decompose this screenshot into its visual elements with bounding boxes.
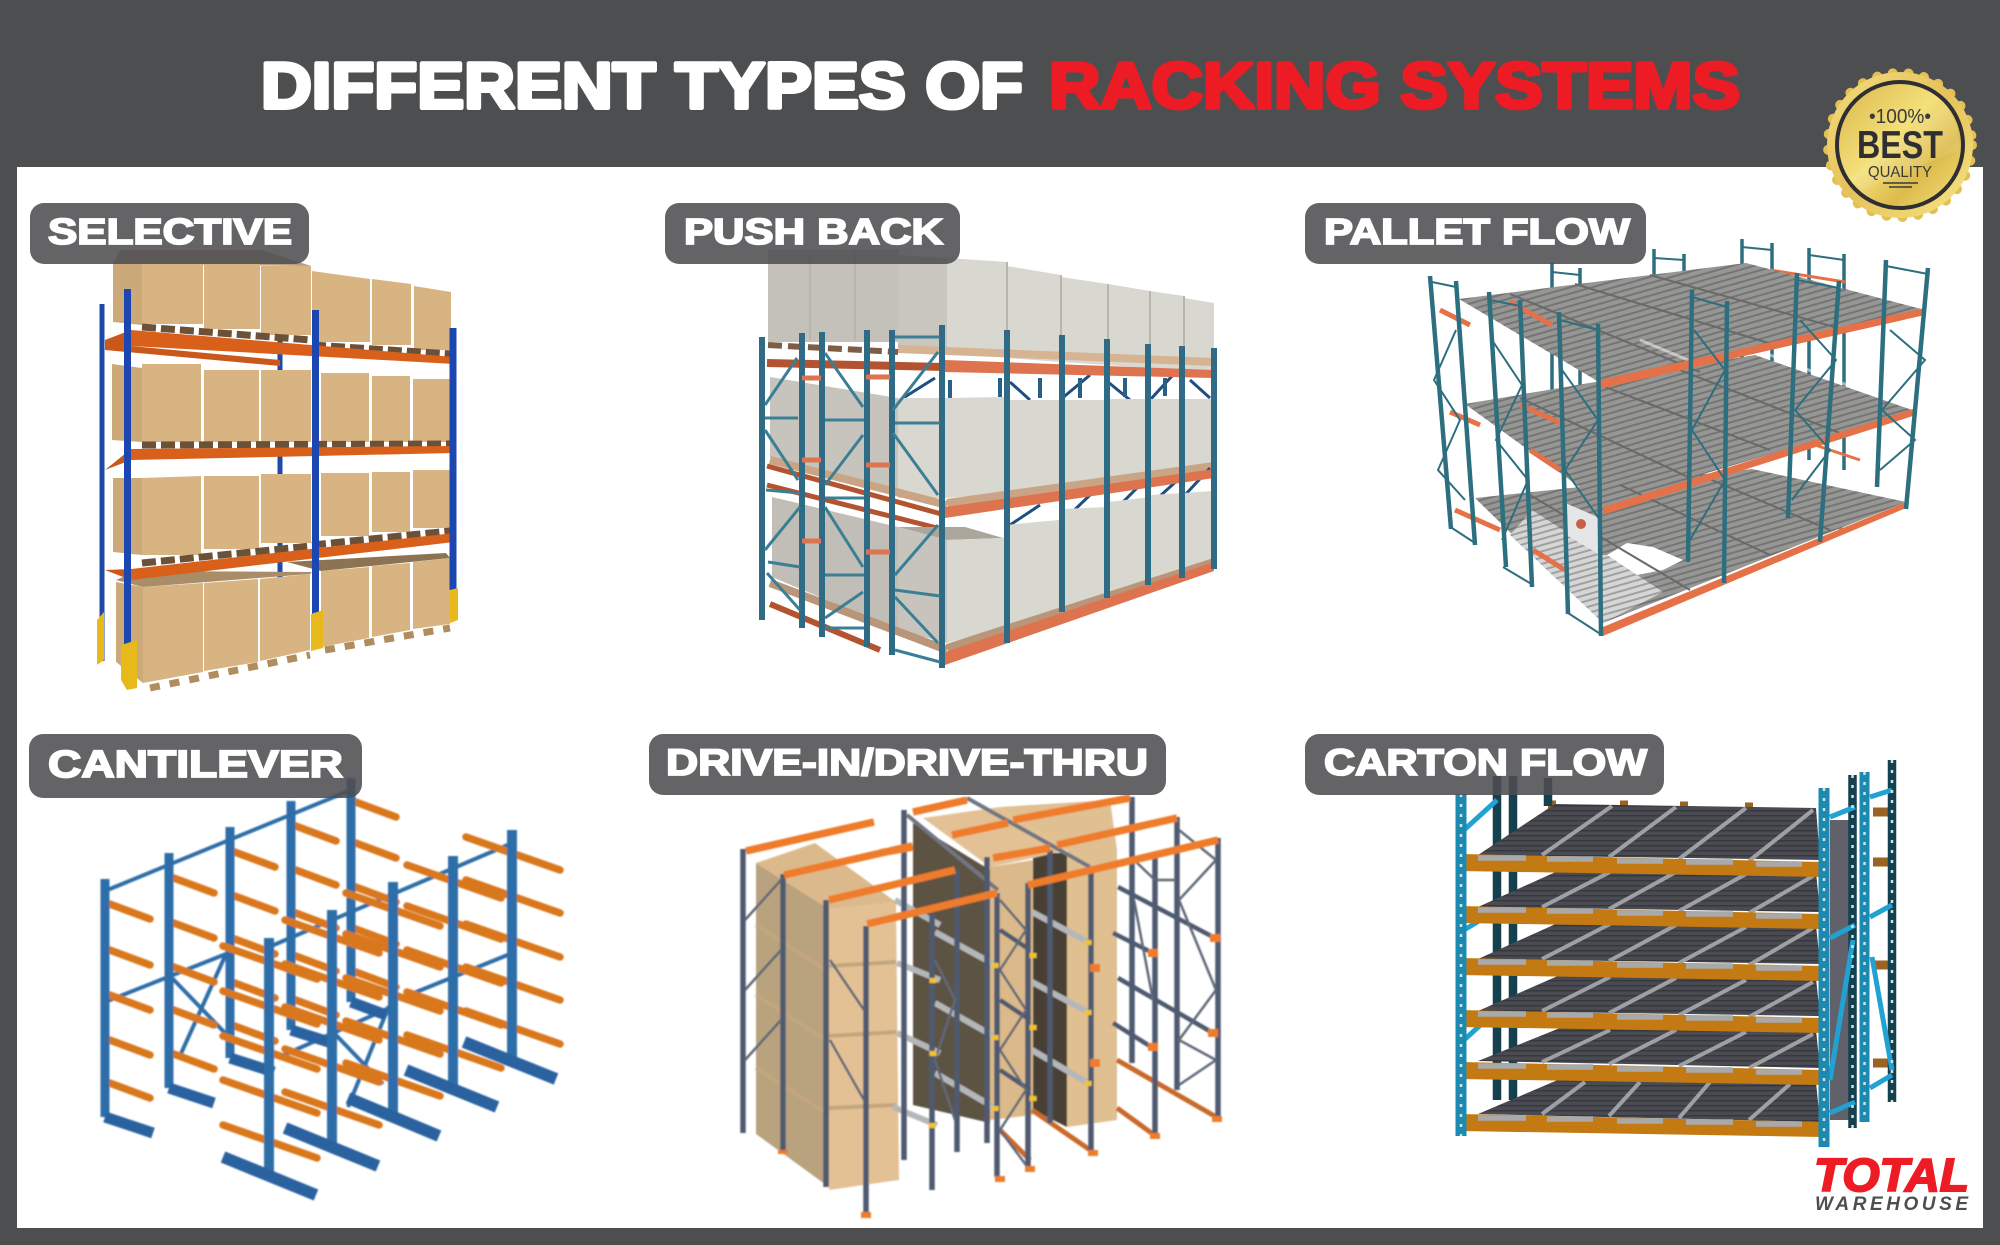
badge: 100% best quality: QUALITY <box>1868 164 1932 181</box>
label: push back: PUSH BACK <box>684 211 943 252</box>
frame connectors and bracing <box>105 790 510 1107</box>
back beam stubs <box>1548 805 1888 1063</box>
top orange beams <box>746 798 1218 924</box>
gap in bottom shelf <box>1607 543 1683 575</box>
title: DIFFERENT TYPES OF <box>261 49 1023 122</box>
middle box face <box>990 860 1033 1120</box>
label: drive-in / drive-thru: DRIVE-IN/DRIVE-THRU <box>666 742 1148 783</box>
orange beams <box>1460 854 1822 1137</box>
badge: 100% best quality <box>1827 72 1973 218</box>
label: selective <box>30 203 309 264</box>
left box stack top <box>756 843 896 909</box>
front column arms <box>223 837 560 1158</box>
middle box top <box>923 807 1067 867</box>
label: pallet flow: PALLET FLOW <box>1324 211 1630 252</box>
level two boxes <box>770 377 898 492</box>
front beams <box>945 360 1214 378</box>
label: push back <box>665 203 960 264</box>
rear columns <box>105 778 351 1117</box>
front bases <box>223 1042 556 1195</box>
title <box>261 49 1740 122</box>
badge: 100% best quality: •100%• <box>1869 106 1931 128</box>
label: carton flow <box>1305 734 1664 795</box>
rear column arms <box>107 801 396 1098</box>
frame bracing <box>745 830 1216 1165</box>
centre dark interior <box>913 823 990 1123</box>
storage rails <box>893 900 1088 1125</box>
label: pallet flow <box>1305 203 1646 264</box>
label: drive-in / drive-thru <box>649 734 1166 795</box>
right box block <box>1000 800 1117 1127</box>
bottom shelf <box>1475 469 1906 623</box>
rack illustration: carton flow <box>1460 760 1892 1147</box>
left box stack front <box>829 902 899 1190</box>
uprights <box>743 797 1218 1214</box>
label: selective: SELECTIVE <box>48 211 292 252</box>
lower orange rails <box>1000 1060 1218 1160</box>
shelves <box>1478 804 1820 1122</box>
level three boxes <box>772 497 898 630</box>
frame bracing <box>765 337 940 662</box>
logo: total warehouse: TOTAL <box>1814 1149 1969 1201</box>
rack illustration: cantilever <box>105 778 560 1195</box>
title: RACKING SYSTEMS <box>1049 49 1740 122</box>
washed-out rollers <box>1510 510 1663 623</box>
rack illustration: push back <box>762 250 1214 668</box>
rear top boxes <box>768 250 898 342</box>
side of shelves <box>1830 820 1849 1120</box>
big top box <box>898 255 947 352</box>
rear uprights <box>1497 760 1892 1128</box>
rear beams, level two <box>767 466 945 530</box>
logo: total warehouse: WAREHOUSE <box>1815 1194 1969 1215</box>
label: carton flow: CARTON FLOW <box>1324 742 1647 783</box>
yellow connectors <box>932 940 1088 1128</box>
tabs <box>1478 858 1802 1124</box>
sign <box>1563 502 1600 555</box>
rack illustration: drive-in / drive-thru <box>743 797 1218 1218</box>
orange feet and brackets <box>783 934 1217 1218</box>
left box stack side <box>756 863 829 1187</box>
front columns <box>269 830 512 1176</box>
uprights <box>762 325 1214 668</box>
badge: 100% best quality: BEST <box>1857 124 1943 167</box>
flow lanes <box>1542 806 1813 1120</box>
front uprights <box>1461 788 1824 1147</box>
frame spacers <box>802 377 890 552</box>
rack illustration: selective <box>97 250 458 690</box>
rear beams, level one <box>767 363 945 367</box>
label: cantilever <box>29 734 362 798</box>
rear bases <box>105 1002 386 1133</box>
rack illustration: pallet flow <box>1430 239 1928 636</box>
label: cantilever: CANTILEVER <box>48 744 343 786</box>
dark strip between boxes <box>1033 853 1067 1127</box>
